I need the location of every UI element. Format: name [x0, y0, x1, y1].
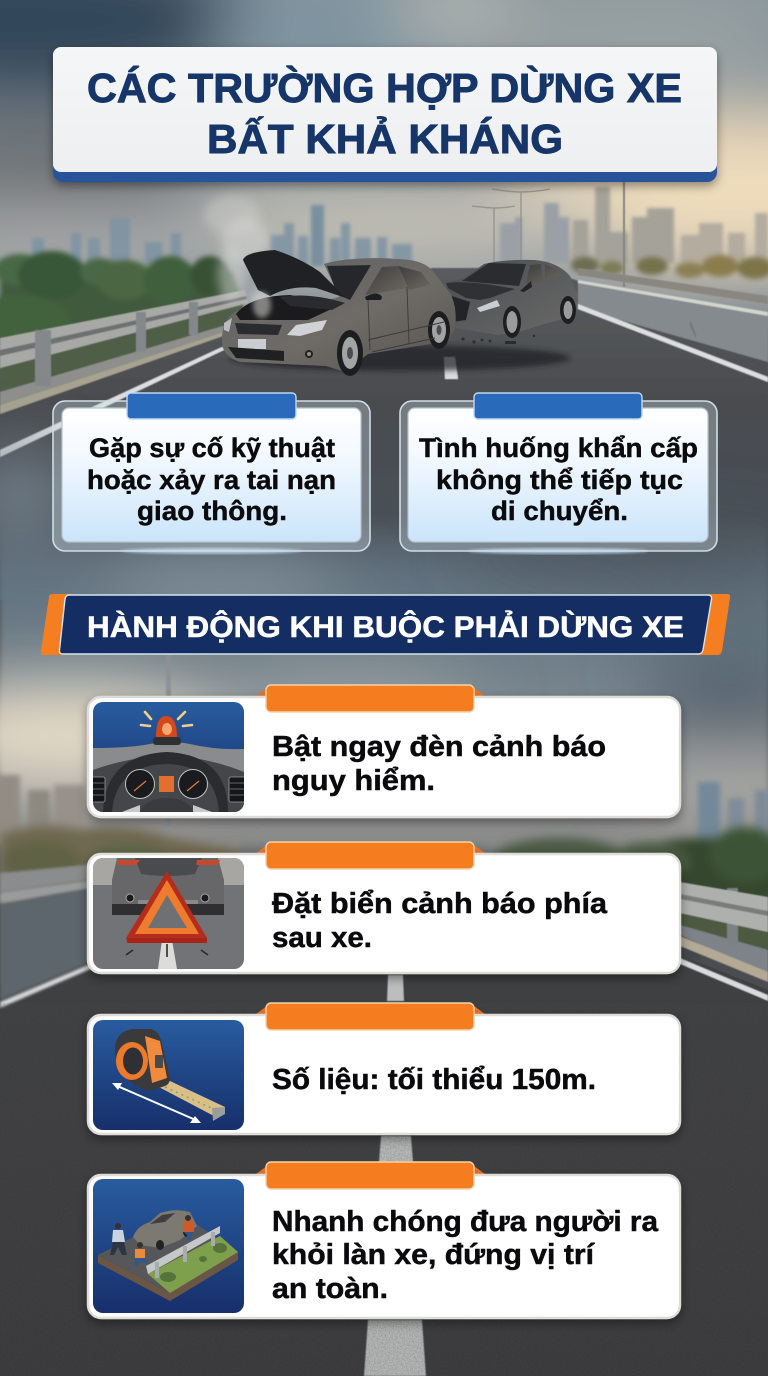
- smoke: [204, 195, 276, 323]
- orange tab: [266, 685, 474, 712]
- orange tab: [266, 1003, 474, 1030]
- icon: people next to guardrail: [93, 1179, 244, 1313]
- step text: sau xe.: [272, 922, 372, 954]
- centre dashes lower: [387, 975, 404, 1001]
- step text: Bật ngay đèn cảnh báo: [272, 731, 606, 763]
- text: Gặp sự cố kỹ thuật: [89, 433, 335, 463]
- skyline left: [32, 205, 412, 266]
- guardrail: [0, 290, 248, 368]
- step 4: move to a safe place: [88, 1162, 680, 1318]
- text: giao thông.: [137, 496, 287, 526]
- title line 1: CÁC TRƯỜNG HỢP DỪNG XE: [87, 65, 682, 111]
- panel: technical fault or accident: [53, 393, 370, 554]
- step text: nguy hiểm.: [272, 765, 435, 797]
- guard right lower: [680, 910, 768, 965]
- step text: khỏi làn xe, đứng vị trí: [272, 1239, 595, 1271]
- road top: [0, 268, 768, 600]
- section banner: [41, 594, 730, 655]
- step 3: measuring tape: [88, 1003, 680, 1134]
- step text: Nhanh chóng đưa người ra: [272, 1206, 659, 1238]
- icon: dashboard and beacon: [91, 702, 246, 812]
- text: Tình huống khẩn cấp: [419, 433, 698, 463]
- text: [419, 433, 698, 526]
- text: di chuyển.: [491, 496, 628, 526]
- step text: [272, 731, 606, 797]
- background scene lower: [0, 515, 768, 905]
- kerb left: [0, 322, 224, 405]
- guard back band: [0, 302, 243, 392]
- step text: an toàn.: [272, 1273, 388, 1305]
- step 2: warning triangle: [88, 842, 680, 973]
- tab: [474, 393, 642, 419]
- icon: warning triangle behind car: [93, 858, 244, 969]
- step text: [272, 1206, 659, 1305]
- skyline lower: [0, 775, 768, 850]
- centre dash: [444, 357, 458, 379]
- orange tab: [266, 1162, 474, 1189]
- title line 2: BẤT KHẢ KHÁNG: [207, 116, 563, 162]
- illustration: broken-down car and collided car: [204, 195, 578, 376]
- text: hoặc xảy ra tai nạn: [87, 465, 336, 495]
- right barrier: [578, 268, 768, 304]
- orange tab: [266, 842, 474, 869]
- step text: [272, 888, 608, 954]
- title panel: [53, 47, 717, 182]
- banner text: HÀNH ĐỘNG KHI BUỘC PHẢI DỪNG XE: [87, 610, 684, 644]
- step text: Đặt biển cảnh báo phía: [272, 888, 608, 920]
- step text: Số liệu: tối thiểu 150m.: [272, 1064, 596, 1096]
- text: không thể tiếp tục: [436, 465, 683, 495]
- street lights and pole: [472, 182, 624, 287]
- icon: tape measure: [93, 1020, 244, 1130]
- debris: [462, 335, 535, 344]
- car 2: [446, 260, 578, 338]
- trees top: [0, 251, 240, 345]
- lower scene pole: [166, 655, 171, 855]
- panel: emergency situation: [400, 393, 717, 554]
- car 1: [222, 250, 456, 376]
- skyline right: [500, 187, 768, 264]
- trees lower: [0, 826, 768, 918]
- tab: [127, 393, 296, 419]
- text: [87, 433, 336, 526]
- step 1: hazard lights: [88, 685, 680, 817]
- road lower: [0, 955, 768, 1376]
